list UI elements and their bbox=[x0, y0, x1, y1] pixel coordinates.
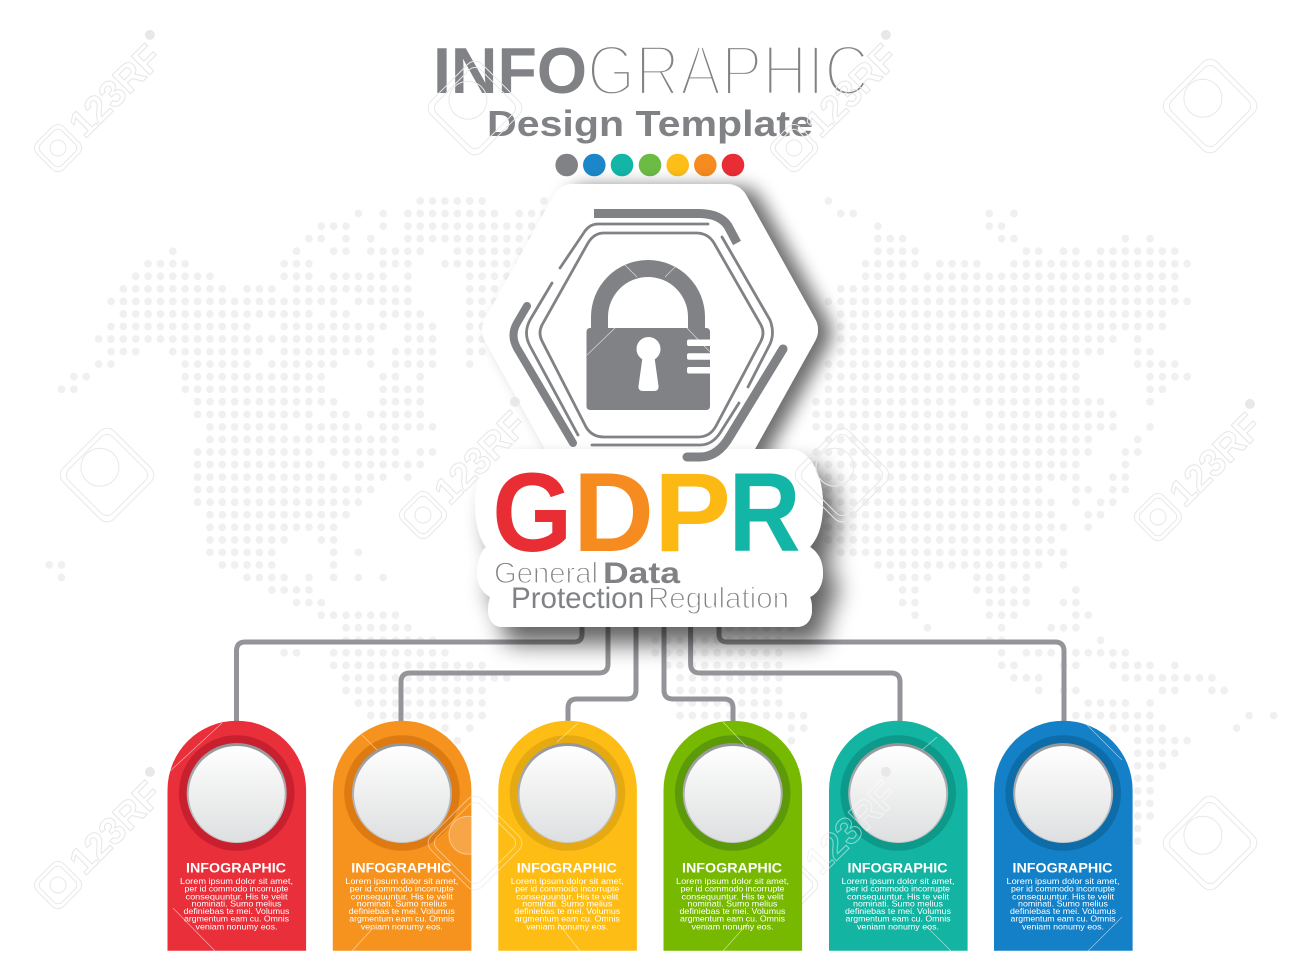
card 3: yellow: definiebas te mei. Volumus bbox=[514, 906, 620, 916]
card 5: teal: nominati. Sumo melius bbox=[853, 899, 943, 909]
subtitle: Design Template: Design Template bbox=[487, 103, 813, 144]
card 2: orange: argmentum eam cu. Omnis bbox=[349, 914, 454, 924]
card 5: teal: veniam nonumy eos. bbox=[857, 921, 939, 931]
card 4: green: veniam nonumy eos. bbox=[692, 921, 774, 931]
GDPR letters: P bbox=[654, 450, 731, 575]
card 5: teal: consequuntur. His te velit bbox=[847, 891, 950, 901]
watermark 5: 123RF bbox=[62, 774, 170, 883]
card 1: red bbox=[168, 721, 306, 951]
card 1: red: per id commodo incorrupte bbox=[184, 884, 289, 894]
watermark 1: 123RF bbox=[62, 37, 170, 146]
card 2: orange bbox=[333, 721, 471, 951]
card 5: teal bbox=[829, 721, 968, 951]
card 5: teal: argmentum eam cu. Omnis bbox=[846, 914, 950, 924]
card 3: yellow: Lorem ipsum dolor sit amet, bbox=[511, 876, 624, 886]
card 2: orange: consequuntur. His te velit bbox=[351, 891, 454, 901]
full name text: Data bbox=[603, 557, 680, 590]
card 4: green: definiebas te mei. Volumus bbox=[680, 906, 786, 916]
card 6: blue: definiebas te mei. Volumus bbox=[1010, 906, 1116, 916]
card 5: teal: Lorem ipsum dolor sit amet, bbox=[842, 876, 954, 886]
card 1: red: nominati. Sumo melius bbox=[192, 899, 282, 909]
card 4: green: Lorem ipsum dolor sit amet, bbox=[676, 876, 789, 886]
GDPR letters: R bbox=[729, 450, 801, 575]
card 4: green: INFOGRAPHIC bbox=[682, 860, 782, 876]
full name text bbox=[494, 557, 789, 615]
card 5: teal: per id commodo incorrupte bbox=[846, 884, 950, 894]
plate shape bbox=[475, 449, 823, 627]
card 4: green: nominati. Sumo melius bbox=[688, 899, 778, 909]
full name text: Regulation bbox=[648, 582, 789, 615]
card 4: green: per id commodo incorrupte bbox=[680, 884, 785, 894]
watermark stamp under teal card bbox=[766, 774, 906, 914]
card 6: blue: per id commodo incorrupte bbox=[1011, 884, 1115, 894]
card 2: orange: per id commodo incorrupte bbox=[350, 884, 454, 894]
hexagon line frame bbox=[514, 214, 783, 457]
title bold part: INFO bbox=[433, 34, 587, 107]
watermark 3: 123RF bbox=[427, 404, 535, 513]
full name text: General bbox=[494, 557, 598, 590]
card 3: yellow: per id commodo incorrupte bbox=[515, 884, 620, 894]
dotted world map background bbox=[49, 201, 1275, 841]
colour dots row bbox=[555, 154, 744, 176]
GDPR letters: G bbox=[492, 450, 572, 575]
title thin part: GRAPHIC bbox=[587, 32, 869, 111]
card 3: yellow: INFOGRAPHIC bbox=[517, 860, 617, 876]
watermark egg 3 bbox=[424, 57, 526, 159]
card 3: yellow bbox=[498, 721, 637, 951]
icon: padlock bbox=[586, 263, 713, 410]
card 1: red: definiebas te mei. Volumus bbox=[184, 906, 290, 916]
card 1: red: INFOGRAPHIC bbox=[186, 860, 286, 876]
watermark 6 over teal card: 123RF bbox=[798, 774, 906, 883]
panel: hexagon frame with lock bbox=[514, 214, 783, 457]
watermark 3 bbox=[395, 395, 545, 544]
watermark stamp under teal card: 123RF bbox=[798, 774, 906, 883]
card 1: red: argmentum eam cu. Omnis bbox=[184, 914, 289, 924]
watermark 2: 123RF bbox=[798, 37, 906, 146]
card 6: blue bbox=[994, 721, 1133, 951]
watermark 5 bbox=[30, 765, 180, 914]
card 4: green: consequuntur. His te velit bbox=[682, 891, 784, 901]
hexagon plate bbox=[504, 206, 796, 454]
card 3: yellow: argmentum eam cu. Omnis bbox=[515, 914, 620, 924]
card 6: blue: consequuntur. His te velit bbox=[1012, 891, 1115, 901]
card 3: yellow: veniam nonumy eos. bbox=[526, 921, 608, 931]
card 2: orange: INFOGRAPHIC bbox=[351, 860, 451, 876]
card 2: orange: Lorem ipsum dolor sit amet, bbox=[345, 876, 458, 886]
card 5: teal: INFOGRAPHIC bbox=[848, 860, 948, 876]
card 1: red: veniam nonumy eos. bbox=[196, 921, 278, 931]
card 6: blue: argmentum eam cu. Omnis bbox=[1010, 914, 1116, 924]
watermark 1 bbox=[30, 28, 180, 177]
card 1: red: Lorem ipsum dolor sit amet, bbox=[180, 876, 293, 886]
card 2: orange: definiebas te mei. Volumus bbox=[349, 906, 455, 916]
watermark 2 bbox=[766, 28, 916, 177]
card 6: blue: INFOGRAPHIC bbox=[1012, 860, 1112, 876]
connector lines bbox=[236, 620, 1064, 722]
title: INFOGRAPHIC bbox=[433, 32, 869, 111]
card 4: green bbox=[664, 721, 802, 951]
watermark egg 4 bbox=[1159, 55, 1261, 157]
panel: GDPR label plate bbox=[475, 449, 823, 627]
full name text: Protection bbox=[511, 582, 644, 615]
card 6: blue: veniam nonumy eos. bbox=[1022, 921, 1104, 931]
card 5: teal: definiebas te mei. Volumus bbox=[845, 906, 951, 916]
watermark egg 6 bbox=[1159, 792, 1261, 894]
card 6: blue: nominati. Sumo melius bbox=[1018, 899, 1108, 909]
card 3: yellow: nominati. Sumo melius bbox=[522, 899, 612, 909]
watermark egg 1 bbox=[56, 424, 158, 526]
GDPR letters: D bbox=[573, 450, 654, 575]
card 4: green: argmentum eam cu. Omnis bbox=[680, 914, 785, 924]
watermark egg 2 bbox=[791, 424, 893, 526]
GDPR letters bbox=[492, 450, 801, 575]
card 1: red: consequuntur. His te velit bbox=[186, 891, 288, 901]
watermark egg under orange and yellow cards bbox=[424, 792, 526, 894]
watermark 4: 123RF bbox=[1162, 406, 1270, 515]
watermark 4 bbox=[1130, 397, 1280, 546]
watermark egg 5 over cards bbox=[424, 792, 526, 894]
card 6: blue: Lorem ipsum dolor sit amet, bbox=[1006, 876, 1120, 886]
card 2: orange: nominati. Sumo melius bbox=[357, 899, 447, 909]
card 3: yellow: consequuntur. His te velit bbox=[516, 891, 619, 901]
card 2: orange: veniam nonumy eos. bbox=[361, 921, 443, 931]
